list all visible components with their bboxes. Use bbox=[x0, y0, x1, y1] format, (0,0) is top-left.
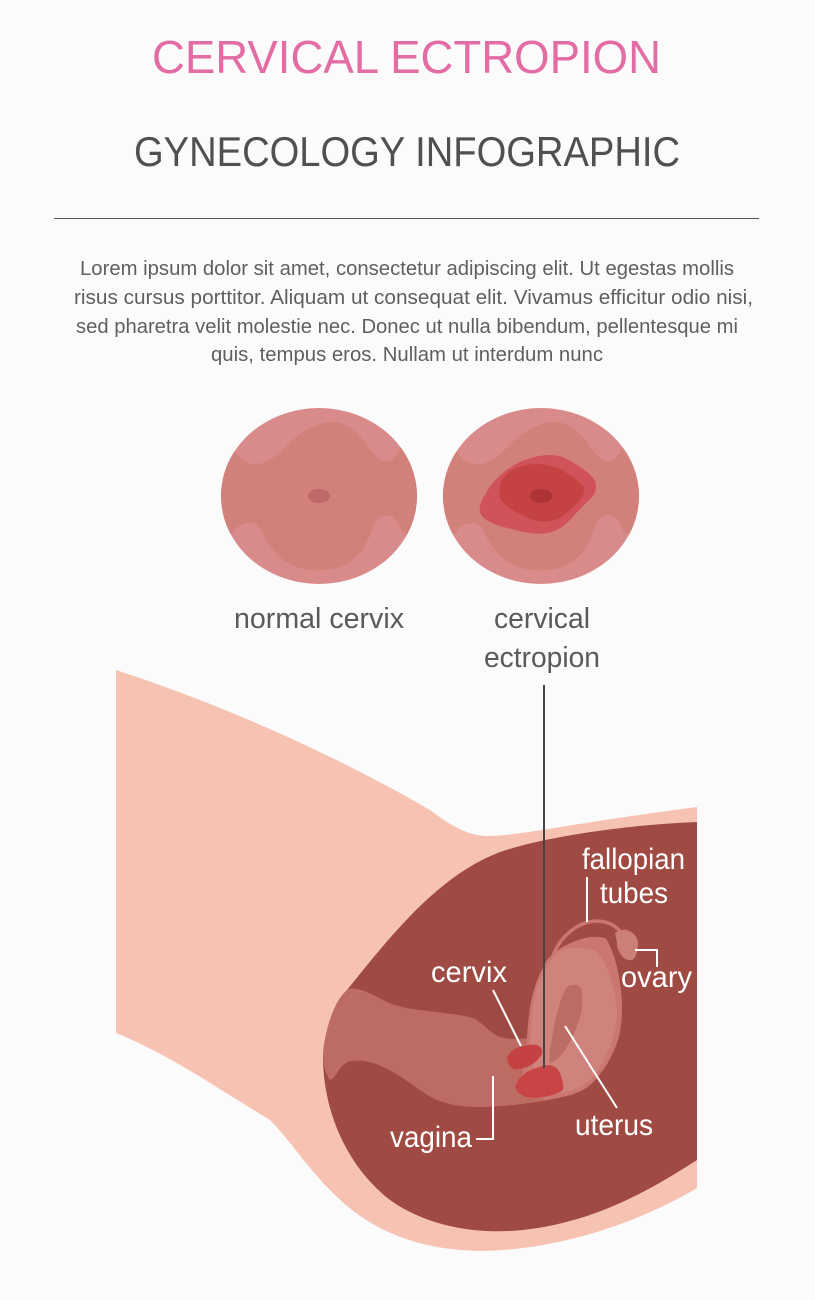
label: fallopian tubes: tubes bbox=[600, 877, 668, 910]
subtitle: GYNECOLOGY INFOGRAPHIC bbox=[134, 128, 680, 175]
label: cervical ectropion: cervical bbox=[494, 603, 590, 635]
label: cervical ectropion bbox=[484, 603, 600, 674]
uterus outer bbox=[520, 937, 622, 1100]
label: cervix: cervix bbox=[431, 956, 507, 989]
pointer: cervical ectropion bbox=[543, 685, 545, 1068]
label: vagina: vagina bbox=[390, 1121, 472, 1154]
cervix red top bbox=[507, 1045, 542, 1069]
fallopian tube bbox=[553, 921, 623, 956]
intro text block bbox=[74, 258, 753, 366]
uterus body bbox=[530, 948, 617, 1093]
ectropion inner lesion bbox=[499, 464, 584, 522]
label: cervical ectropion: ectropion bbox=[484, 642, 600, 674]
intro text block: risus cursus porttitor. Aliquam ut consequat elit. Vivamus efficitur odio nisi, bbox=[74, 287, 753, 309]
body silhouette bbox=[116, 670, 697, 1251]
cervix red bottom bbox=[515, 1065, 563, 1098]
intro text block: Lorem ipsum dolor sit amet, consectetur adipiscing elit. Ut egestas mollis bbox=[80, 258, 734, 280]
vagina bbox=[323, 988, 575, 1107]
panel: normal cervix bbox=[221, 408, 417, 584]
uterine cavity bbox=[550, 985, 582, 1063]
label: fallopian tubes: fallopian bbox=[582, 843, 685, 876]
leader lines bbox=[476, 877, 657, 1139]
ovary bbox=[615, 930, 638, 960]
intro text block: sed pharetra velit molestie nec. Donec ut nulla bibendum, pellentesque mi bbox=[76, 316, 738, 338]
label: ovary: ovary bbox=[621, 961, 692, 994]
label: fallopian tubes bbox=[582, 843, 685, 910]
intro text block: quis, tempus eros. Nullam ut interdum nunc bbox=[211, 344, 603, 366]
pelvic cavity bbox=[323, 822, 697, 1231]
label: uterus: uterus bbox=[575, 1109, 653, 1142]
label: normal cervix: normal cervix bbox=[234, 603, 404, 635]
anatomy illustration bbox=[116, 670, 697, 1251]
ectropion outer lesion bbox=[480, 455, 596, 534]
title: CERVICAL ECTROPION bbox=[152, 31, 661, 83]
panel: cervical ectropion bbox=[443, 408, 639, 584]
